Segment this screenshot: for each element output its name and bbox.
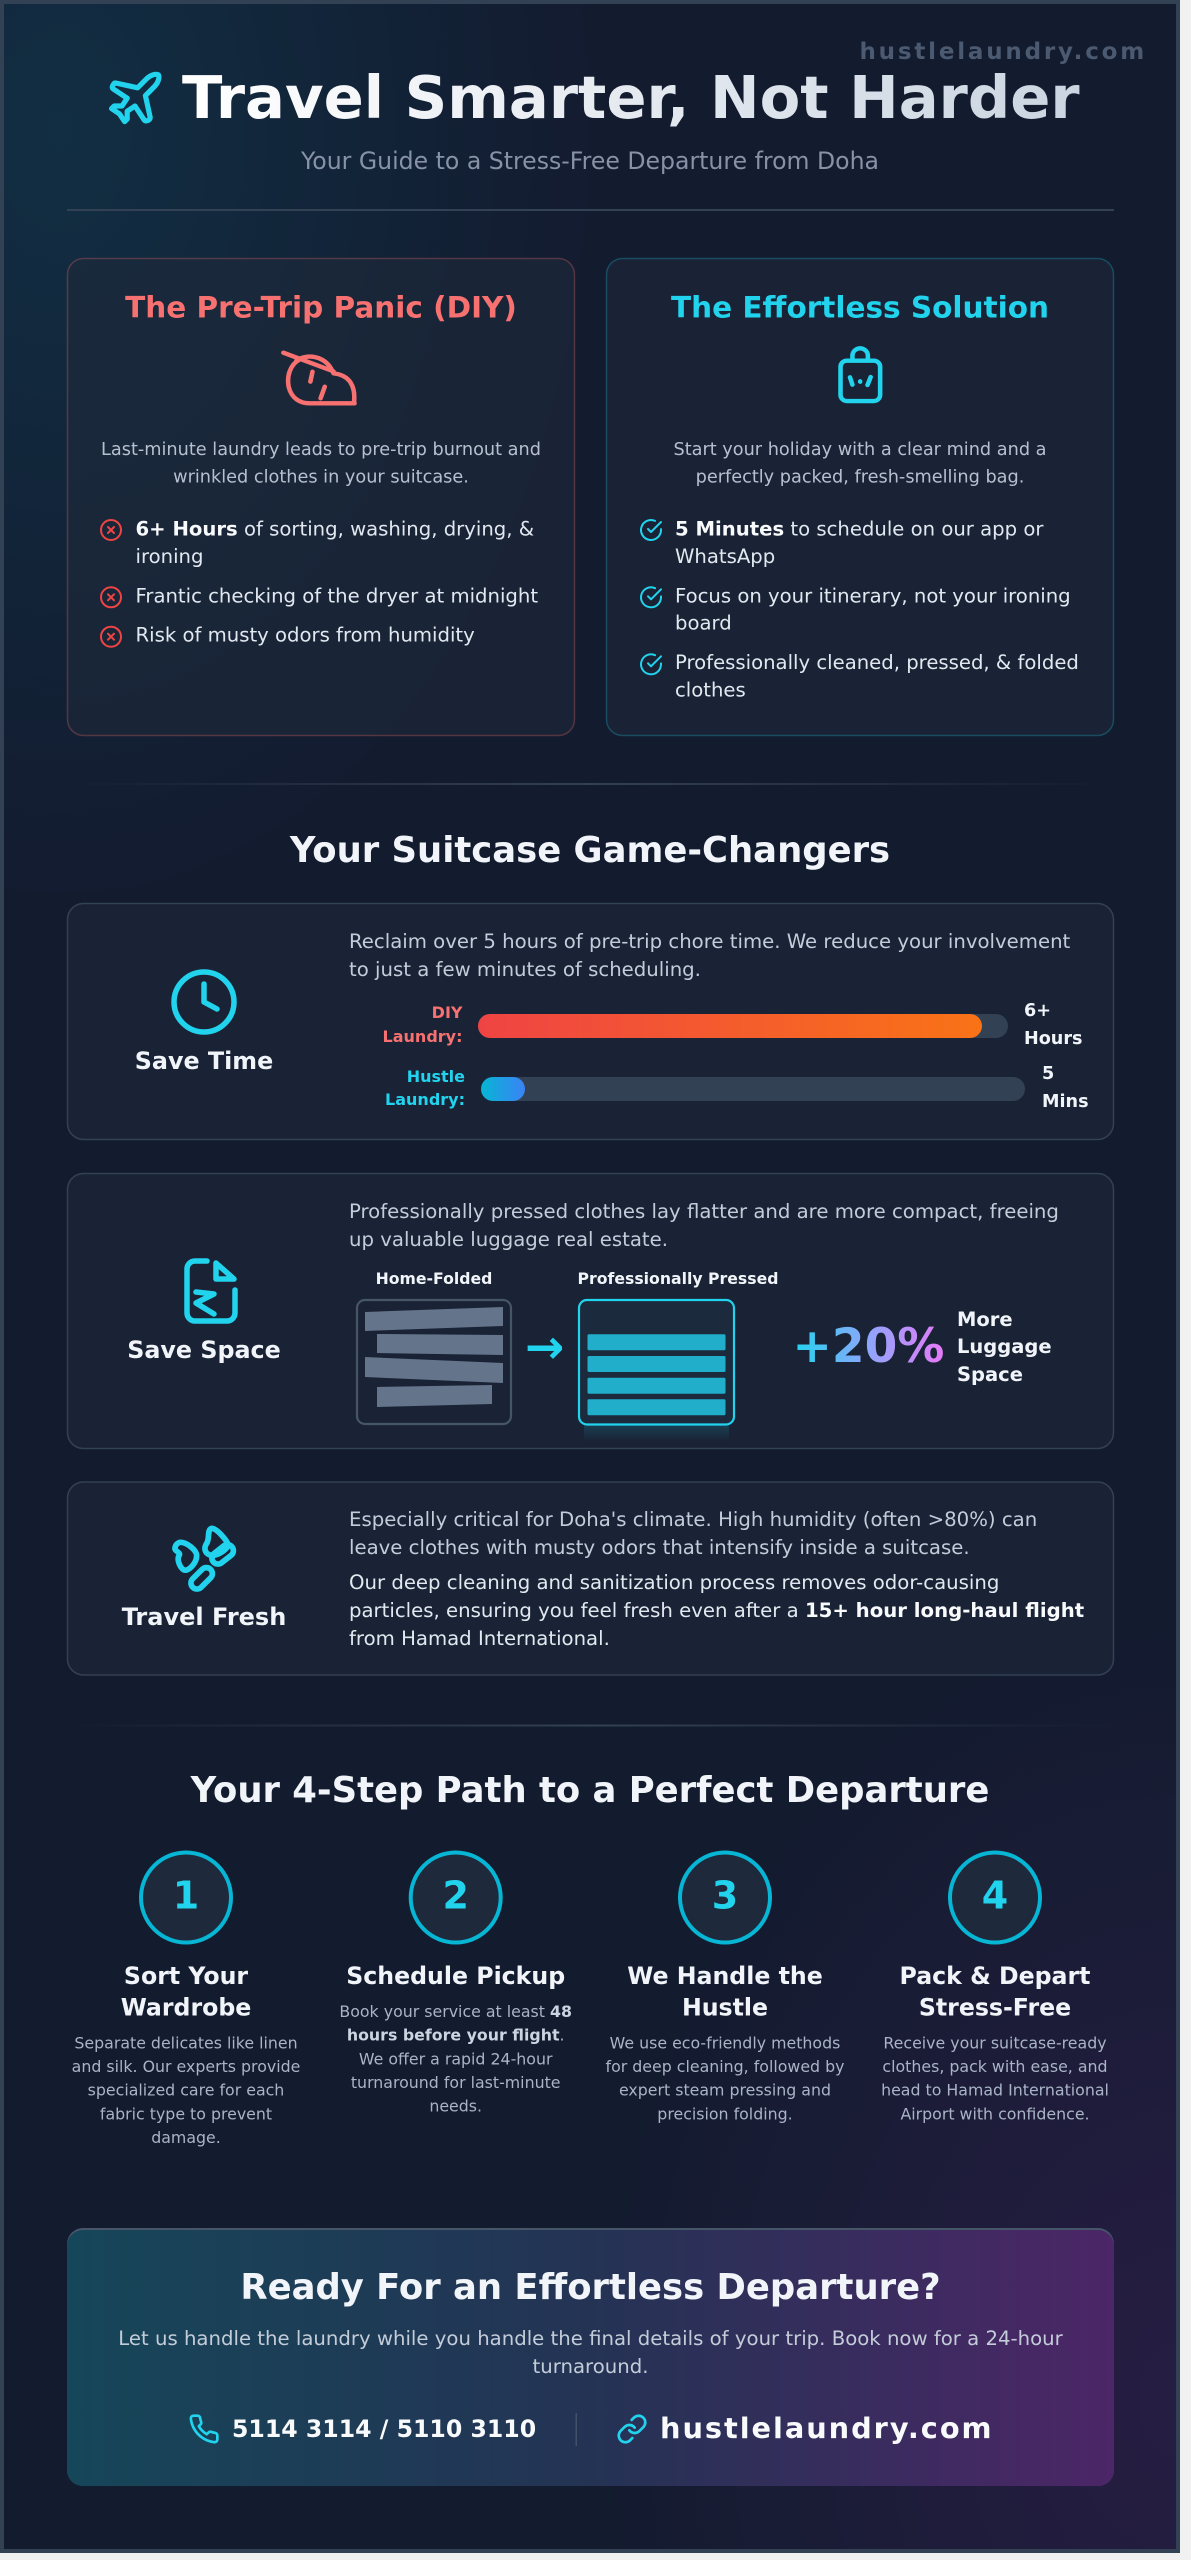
label: travel fresh: Travel Fresh bbox=[122, 1603, 286, 1631]
step 1: specialized care for each bbox=[88, 2081, 284, 2100]
list: solution items: WhatsApp bbox=[675, 545, 775, 568]
step 3: expert steam pressing and bbox=[619, 2081, 831, 2100]
list: solution items: clothes bbox=[675, 679, 746, 702]
icon: wrinkled shirt leaf bbox=[281, 350, 357, 406]
heading: 4-step path: Your 4-Step Path to a Perfect Departure bbox=[190, 1770, 989, 1811]
step 2: We offer a rapid 24-hour bbox=[359, 2049, 553, 2068]
panel: call to action bbox=[67, 2228, 1114, 2486]
stat: +20%: Luggage bbox=[957, 1335, 1052, 1358]
step 2: 2 bbox=[442, 1874, 469, 1918]
icon: plane bbox=[109, 72, 162, 124]
step 3: 3 bbox=[712, 1874, 738, 1918]
bar row: DIY: DIY bbox=[432, 1003, 463, 1022]
text block: climate: Especially critical for Doha's climate. High humidity (often >80%) can bbox=[349, 1508, 1037, 1531]
cta text: Let us handle the laundry while you handle the final details of your trip. Book now for a 24-hour bbox=[118, 2327, 1064, 2350]
bar row: DIY: 6+ bbox=[1024, 1001, 1051, 1021]
cta text: turnaround. bbox=[533, 2355, 648, 2378]
step 3: Hustle bbox=[682, 1994, 768, 2022]
list: solution items: board bbox=[675, 612, 732, 634]
step 1: 1 bbox=[173, 1874, 199, 1918]
panel: the effortless solution bbox=[606, 258, 1114, 736]
bar row: Hustle: 5 bbox=[1042, 1064, 1054, 1084]
step 1: and silk. Our experts provide bbox=[72, 2057, 300, 2076]
icon: check circle bbox=[640, 653, 662, 676]
step 2: hours before your flight. bbox=[347, 2026, 565, 2045]
panel: save space bbox=[68, 1174, 1114, 1448]
diagram: home-folded: Home-Folded bbox=[376, 1269, 492, 1288]
text block: climate: leave clothes with musty odors that intensify inside a suitcase. bbox=[349, 1536, 970, 1559]
text block: save time copy: Reclaim over 5 hours of pre-trip chore time. We reduce your involvement bbox=[349, 930, 1071, 953]
panel: travel fresh bbox=[68, 1482, 1114, 1675]
step 2: Schedule Pickup bbox=[346, 1962, 565, 1990]
icon: fresh droplets bbox=[172, 1526, 236, 1592]
step 1: damage. bbox=[151, 2128, 221, 2147]
bar chart: time comparison bbox=[383, 1001, 1089, 1112]
header bbox=[112, 63, 1080, 175]
list: solution items: 5 Minutes bbox=[675, 517, 784, 540]
list: panic items: ironing bbox=[136, 545, 203, 568]
contact: phone: 5114 3114 / 5110 3110 bbox=[232, 2415, 536, 2443]
subtitle: Your Guide to a Stress-Free Departure from Doha bbox=[300, 147, 879, 175]
step 4: Receive your suitcase-ready bbox=[883, 2033, 1107, 2052]
bar row: Hustle: Hustle bbox=[407, 1067, 465, 1086]
diagram: home-folded bbox=[357, 1269, 511, 1424]
step 4: 4 bbox=[982, 1874, 1008, 1918]
icon: clock bbox=[174, 972, 234, 1032]
step 3: We Handle the bbox=[627, 1962, 823, 1990]
bar row: DIY: Laundry: bbox=[383, 1027, 462, 1046]
step 4: Airport with confidence. bbox=[900, 2104, 1090, 2123]
arrow: → bbox=[525, 1320, 564, 1375]
step 2: turnaround for last-minute bbox=[351, 2073, 561, 2092]
step 3: We use eco-friendly methods bbox=[610, 2033, 840, 2052]
icon: x circle bbox=[100, 519, 122, 541]
text block: panic description: Last-minute laundry leads to pre-trip burnout and bbox=[101, 440, 541, 460]
step 4: Pack & Depart bbox=[900, 1962, 1090, 1990]
step 3: precision folding. bbox=[657, 2104, 793, 2123]
icon: x circle bbox=[100, 626, 122, 648]
step 1: Wardrobe bbox=[121, 1994, 251, 2022]
label: save space: Save Space bbox=[127, 1336, 281, 1364]
panel: save time bbox=[68, 904, 1114, 1140]
text block: save space copy: up valuable luggage real estate. bbox=[349, 1228, 668, 1251]
step 4: Stress-Free bbox=[919, 1994, 1071, 2022]
panel: the pre-trip panic bbox=[68, 258, 574, 736]
step 4 bbox=[881, 1852, 1109, 2123]
step 1: Sort Your bbox=[124, 1962, 248, 1990]
list: solution items bbox=[641, 517, 1079, 702]
text block: save time copy: to just a few minutes of scheduling. bbox=[349, 958, 701, 981]
step 2: Book your service at least 48 bbox=[339, 2002, 572, 2021]
list: panic items: of sorting, washing, drying, & bbox=[238, 517, 534, 540]
stat: +20%: Space bbox=[957, 1363, 1023, 1386]
text block: cleaning: Our deep cleaning and sanitization process removes odor-causing bbox=[349, 1571, 999, 1594]
step 4: clothes, pack with ease, and bbox=[882, 2057, 1108, 2076]
watermark: hustlelaundry.com bbox=[860, 39, 1147, 65]
bar row: Hustle: Laundry: bbox=[385, 1090, 465, 1109]
text block: cleaning: 15+ hour long-haul flight bbox=[805, 1599, 1084, 1622]
text block: panic description: wrinkled clothes in your suitcase. bbox=[173, 468, 469, 488]
cta heading: Ready For an Effortless Departure? bbox=[240, 2267, 941, 2308]
text block: cleaning: particles, ensuring you feel fresh even after a bbox=[349, 1599, 805, 1622]
step 4: head to Hamad International bbox=[881, 2081, 1109, 2100]
icon: x circle bbox=[100, 586, 122, 608]
step 1: fabric type to prevent bbox=[100, 2104, 272, 2123]
list: panic items bbox=[101, 517, 538, 647]
text block: solution description: perfectly packed, fresh-smelling bag. bbox=[696, 468, 1024, 488]
title: Travel Smarter, Not Harder bbox=[182, 63, 1080, 132]
icon: document bbox=[187, 1261, 235, 1321]
step 2: needs. bbox=[429, 2097, 482, 2116]
text block: cleaning: from Hamad International. bbox=[349, 1627, 610, 1650]
list: solution items: Professionally cleaned, pressed, & folded bbox=[675, 651, 1079, 674]
bar row: Hustle: Mins bbox=[1042, 1092, 1089, 1112]
text block: save space copy: Professionally pressed clothes lay flatter and are more compact, freeing bbox=[349, 1200, 1059, 1223]
list: panic items: 6+ Hours bbox=[136, 517, 238, 540]
stat: +20% bbox=[792, 1308, 1052, 1386]
text block: solution description: Start your holiday with a clear mind and a bbox=[673, 440, 1047, 460]
step 3 bbox=[606, 1852, 844, 2123]
heading: panic: The Pre-Trip Panic (DIY) bbox=[125, 290, 517, 324]
step 1: Separate delicates like linen bbox=[74, 2033, 298, 2052]
bar row: DIY: Hours bbox=[1024, 1029, 1082, 1049]
heading: game-changers: Your Suitcase Game-Changers bbox=[289, 830, 890, 871]
diagram: professionally pressed bbox=[578, 1269, 778, 1441]
contact: website: hustlelaundry.com bbox=[660, 2411, 994, 2445]
step 2 bbox=[339, 1852, 572, 2116]
list: solution items: Focus on your itinerary, not your ironing bbox=[675, 584, 1071, 607]
heading: solution: The Effortless Solution bbox=[671, 290, 1049, 324]
icon: check circle bbox=[640, 519, 662, 541]
label: save time: Save Time bbox=[135, 1047, 273, 1075]
list: solution items: to schedule on our app or bbox=[784, 517, 1044, 540]
list: panic items: Frantic checking of the dryer at midnight bbox=[136, 584, 538, 607]
bar row: DIY bbox=[383, 1001, 1082, 1049]
step 3: for deep cleaning, followed by bbox=[606, 2057, 844, 2076]
bar row: Hustle bbox=[385, 1064, 1089, 1112]
diagram: professionally pressed: Professionally Pressed bbox=[578, 1269, 778, 1288]
list: panic items: Risk of musty odors from humidity bbox=[136, 624, 475, 647]
icon: bag bbox=[838, 346, 882, 404]
step 1 bbox=[72, 1852, 300, 2147]
stat: +20%: +20% bbox=[792, 1319, 944, 1374]
icon: check circle bbox=[640, 586, 662, 608]
stat: +20%: More bbox=[957, 1308, 1013, 1331]
